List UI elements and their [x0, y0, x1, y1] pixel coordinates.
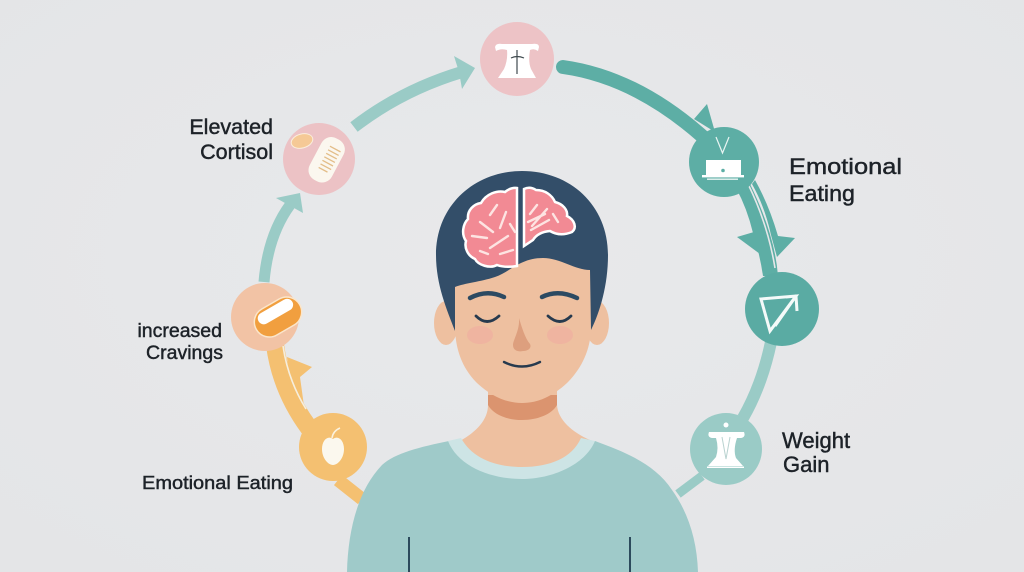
- arrow: emotional eating node to upper right node: [736, 180, 795, 276]
- node: weight gain light teal circle: [690, 413, 762, 485]
- right closed eye: [548, 316, 571, 322]
- label: emotional eating right: Emotional: [789, 154, 902, 179]
- mouth: [504, 362, 540, 366]
- node: upper right dark teal circle: [745, 272, 819, 346]
- label: elevated cortisol: Elevated: [189, 115, 273, 139]
- node: increased cravings peach circle: [231, 283, 307, 351]
- arrow: cravings node to cortisol node: [264, 193, 303, 282]
- face: [454, 245, 591, 403]
- neck shadow: [488, 395, 557, 420]
- node: top pink circle with pillar icon: [480, 22, 554, 96]
- icon: apple: [322, 428, 344, 465]
- node: emotional eating yellow circle: [299, 413, 367, 481]
- arrow: emotional eating node to cravings node: [275, 345, 312, 428]
- label: increased cravings: increased: [137, 320, 222, 342]
- connector: emotional eating node to shoulder: [338, 480, 362, 499]
- nose: [513, 318, 531, 351]
- left brain lobe: [463, 188, 517, 267]
- torso with teal shirt: [347, 441, 698, 572]
- icon: triangle with arrow: [761, 296, 797, 331]
- arrow: top node to emotional eating node: [563, 67, 715, 136]
- icon: orange capsule: [249, 292, 307, 342]
- label: emotional eating right: Eating: [789, 181, 855, 206]
- shirt seam right: [629, 537, 631, 572]
- right eyebrow: [542, 293, 577, 298]
- right cheek blush: [547, 326, 573, 344]
- arrow: cortisol to top node: [354, 56, 475, 127]
- icon: laptop with antenna: [702, 137, 744, 180]
- brain icon: [463, 188, 575, 267]
- node: elevated cortisol pink circle: [283, 123, 355, 195]
- label: weight gain: Weight: [782, 428, 850, 453]
- label: emotional eating left: Emotional Eating: [142, 472, 293, 493]
- icon: small orange capsule: [290, 131, 314, 151]
- left cheek blush: [467, 326, 493, 344]
- hair: [436, 171, 608, 331]
- icon: white ribbed capsule: [305, 133, 349, 186]
- label: weight gain: Gain: [783, 452, 829, 477]
- icon: white pedestal: [707, 422, 745, 468]
- connector: weight gain node to shoulder: [678, 476, 702, 494]
- shirt seam left: [408, 537, 410, 572]
- node: laptop teal circle: [689, 127, 759, 197]
- right ear: [585, 301, 609, 345]
- label: increased cravings: Cravings: [146, 342, 223, 364]
- person illustration: [347, 171, 698, 572]
- left ear: [434, 301, 458, 345]
- arrow: upper right node to weight gain node: [743, 342, 771, 418]
- icon: pillar: [495, 44, 539, 78]
- label: elevated cortisol: Cortisol: [200, 140, 273, 164]
- left eyebrow: [470, 293, 504, 298]
- neck: [460, 385, 590, 470]
- right brain lobe: [524, 188, 575, 246]
- shirt collar: [448, 438, 595, 479]
- brain folds: [472, 205, 558, 254]
- left closed eye: [476, 316, 499, 322]
